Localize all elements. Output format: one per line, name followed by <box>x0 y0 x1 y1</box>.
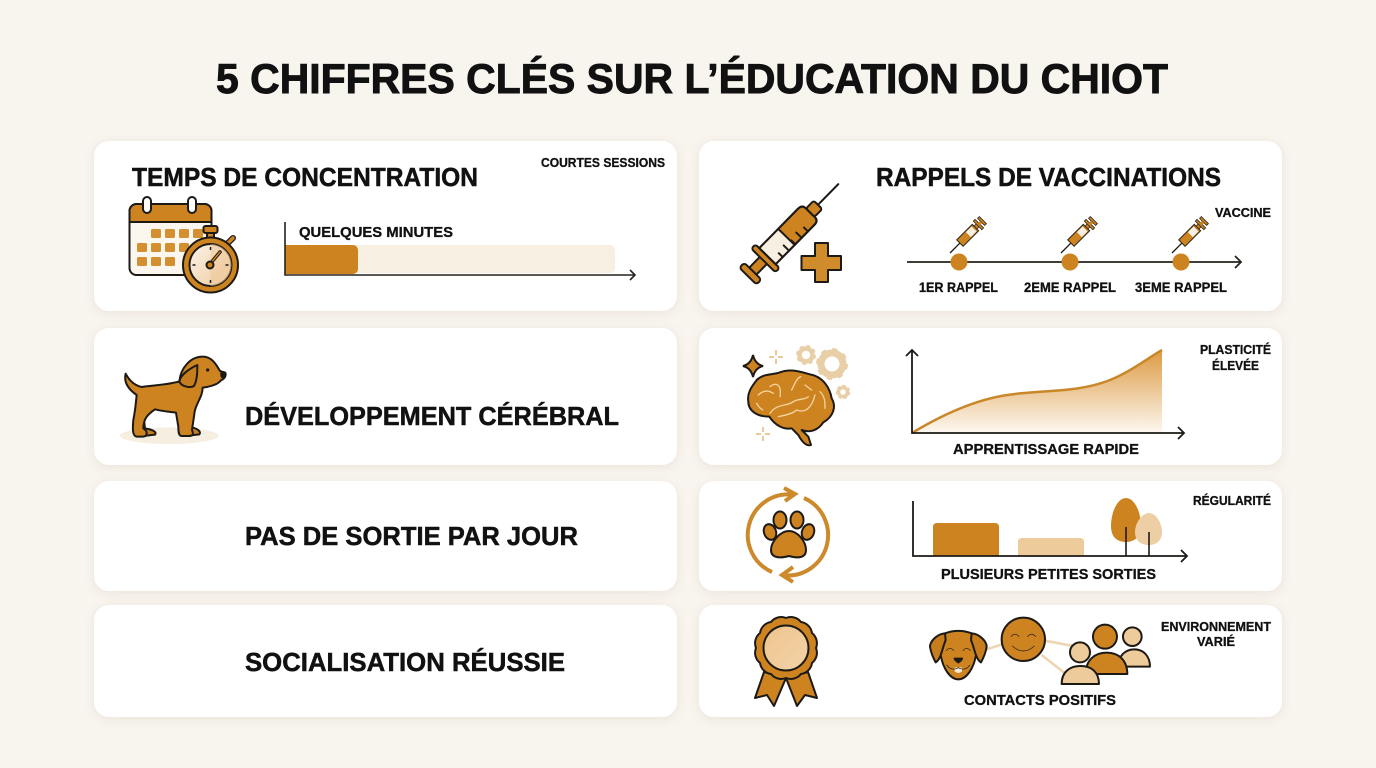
note: courtes sessions: COURTES SESSIONS <box>541 156 665 170</box>
bar chart: sorties: PLUSIEURS PETITES SORTIES <box>941 566 1156 583</box>
timeline: vaccine boosters: 2EME RAPPEL <box>1024 280 1116 295</box>
panel: pas de sortie par jour <box>94 481 677 591</box>
note: environnement varié: VARIÉ <box>1197 634 1235 649</box>
note: environnement varié <box>1161 620 1271 649</box>
heading: socialisation réussie: SOCIALISATION RÉUSSIE <box>245 647 565 677</box>
panel: rappels de vaccinations <box>699 141 1282 311</box>
title: 5 CHIFFRES CLÉS SUR L’ÉDUCATION DU CHIOT <box>216 55 1168 102</box>
area chart: learning curve: APPRENTISSAGE RAPIDE <box>953 441 1139 458</box>
panel: socialisation réussie <box>94 605 677 717</box>
note: plasticité élevée: PLASTICITÉ <box>1200 342 1271 357</box>
note: environnement varié: ENVIRONNEMENT <box>1161 620 1271 634</box>
bar chart: quelques minutes: QUELQUES MINUTES <box>299 225 453 241</box>
diagram: positive contacts <box>930 618 1150 709</box>
icon: stopwatch <box>183 226 238 292</box>
icon: smiling face <box>1002 618 1045 661</box>
timeline: vaccine boosters: 3EME RAPPEL <box>1135 280 1227 295</box>
icon: dog head <box>930 631 987 679</box>
heading: temps de concentration: TEMPS DE CONCENTRATION <box>132 164 478 192</box>
icon: brain with gears <box>743 346 849 445</box>
icon: paw with cycle arrows <box>748 488 828 582</box>
panel: temps de concentration <box>94 141 677 311</box>
timeline: vaccine boosters <box>907 216 1241 295</box>
panel: apprentissage rapide <box>699 328 1282 465</box>
icon: rosette <box>755 617 817 706</box>
panel: développement cérébral <box>94 328 677 465</box>
note: vaccine: VACCINE <box>1215 206 1271 220</box>
heading: développement cérébral: DÉVELOPPEMENT CÉRÉBRAL <box>245 401 619 431</box>
bar chart: sorties <box>913 498 1187 583</box>
note: plasticité élevée: ÉLEVÉE <box>1212 358 1259 373</box>
icon: plus <box>802 243 841 282</box>
note: régularité: RÉGULARITÉ <box>1193 493 1271 508</box>
panel: contacts positifs <box>699 605 1282 717</box>
icon: puppy <box>120 357 226 444</box>
icon: syringe <box>736 172 850 288</box>
heading: pas de sortie par jour: PAS DE SORTIE PAR JOUR <box>245 521 578 551</box>
heading: rappels de vaccinations: RAPPELS DE VACCINATIONS <box>876 164 1221 192</box>
bar chart: quelques minutes <box>285 222 635 280</box>
note: plasticité élevée <box>1200 342 1271 373</box>
label: contacts positifs: CONTACTS POSITIFS <box>964 692 1116 709</box>
timeline: vaccine boosters: 1ER RAPPEL <box>919 280 998 295</box>
icon: calendar <box>130 197 212 275</box>
area chart: learning curve <box>906 350 1184 458</box>
panel: plusieurs petites sorties <box>699 481 1282 591</box>
icon: group of people <box>1062 625 1150 684</box>
